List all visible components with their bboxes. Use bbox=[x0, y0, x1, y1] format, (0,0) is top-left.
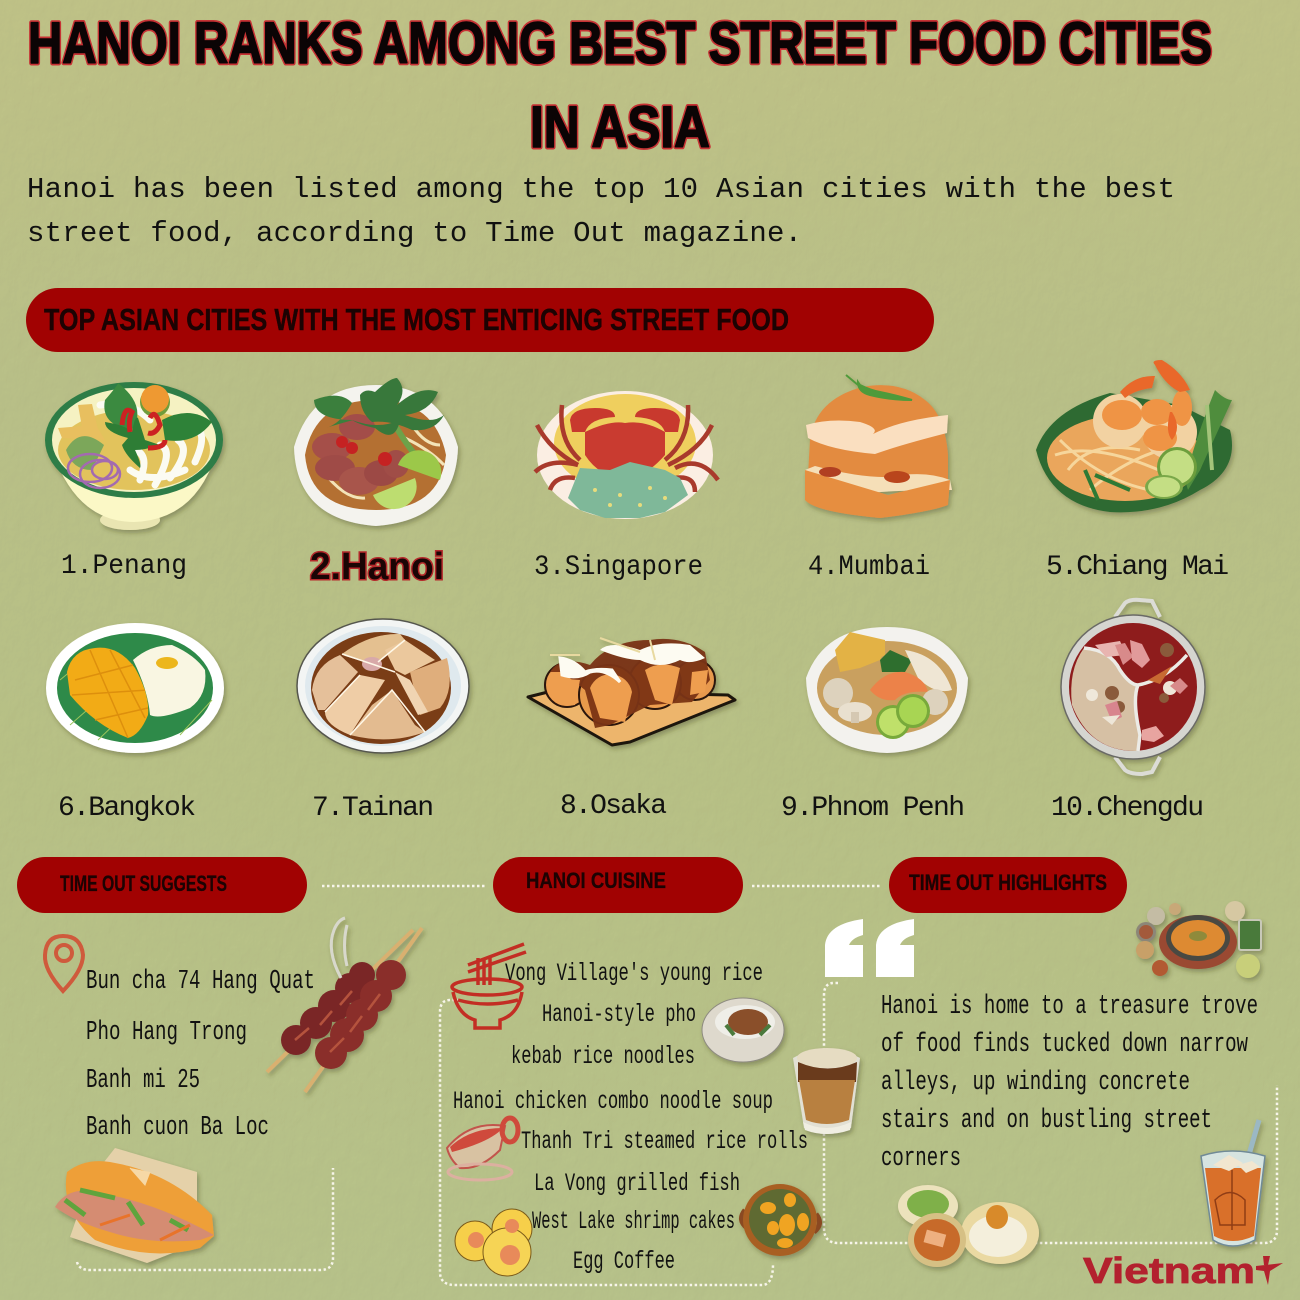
heading: Hanoi cuisine bbox=[493, 857, 743, 913]
image: shrimp cakes bbox=[455, 1209, 532, 1276]
label: Chiang Mai: 5.Chiang Mai bbox=[1046, 552, 1229, 583]
label: Tainan: 7.Tainan bbox=[312, 793, 434, 824]
text: Time Out quote: corners bbox=[881, 1144, 961, 1174]
dish: Mumbai vada pav bbox=[805, 375, 952, 518]
dish: Tainan dumplings bbox=[297, 619, 469, 753]
section banner: top Asian cities: TOP ASIAN CITIES WITH THE MOST ENTICING STREET FOOD bbox=[44, 302, 789, 337]
icon: noodle bowl bbox=[452, 944, 526, 1028]
image: rice noodle bowl bbox=[702, 998, 784, 1062]
list: Hanoi dishes: West Lake shrimp cakes bbox=[532, 1207, 735, 1236]
dish: Singapore chilli crab bbox=[535, 391, 718, 519]
dish: Bangkok mango sticky rice bbox=[46, 623, 224, 753]
list: Hanoi dishes: Egg Coffee bbox=[573, 1247, 675, 1276]
list: suggested places: Banh cuon Ba Loc bbox=[86, 1113, 269, 1143]
heading: Time Out suggests: TIME OUT SUGGESTS bbox=[60, 871, 227, 896]
heading: Time Out suggests bbox=[17, 857, 307, 913]
label: Chengdu: 10.Chengdu bbox=[1051, 793, 1204, 824]
heading: Time Out highlights bbox=[889, 857, 1127, 913]
dish: Chiang Mai pad thai bbox=[1036, 360, 1232, 512]
title: IN ASIA bbox=[530, 95, 710, 160]
logo: Vietnam+: Vietnam bbox=[1083, 1250, 1255, 1291]
list: Hanoi dishes: La Vong grilled fish bbox=[534, 1169, 740, 1198]
intro text: Hanoi has been listed among the top 10 Asian cities with the best bbox=[27, 173, 1175, 206]
image: glass of coffee bbox=[793, 1048, 860, 1134]
label: Mumbai: 4.Mumbai bbox=[808, 552, 930, 583]
heading: Time Out highlights: TIME OUT HIGHLIGHTS bbox=[909, 870, 1107, 895]
dish: Phnom Penh noodle soup bbox=[806, 627, 968, 753]
title: IN ASIA bbox=[530, 95, 710, 160]
list: Hanoi dishes: Hanoi-style pho bbox=[542, 1000, 696, 1029]
list: suggested places bbox=[86, 967, 315, 1143]
label: Hanoi: 2.Hanoi bbox=[310, 546, 444, 588]
list: suggested places: Bun cha 74 Hang Quat bbox=[86, 967, 315, 997]
text: Time Out quote bbox=[881, 992, 1258, 1174]
image: side dishes bbox=[898, 1185, 1039, 1267]
image: iced tea bbox=[1201, 1120, 1265, 1246]
icon: coffee cup bbox=[447, 1118, 518, 1180]
image: fish clay pot bbox=[741, 1184, 820, 1256]
icon: quotation marks bbox=[825, 919, 914, 977]
title bbox=[28, 11, 1212, 160]
image: grilled skewers bbox=[267, 918, 422, 1092]
icon: location pin bbox=[45, 936, 83, 991]
list: suggested places: Banh mi 25 bbox=[86, 1066, 200, 1096]
list: Hanoi dishes bbox=[453, 959, 808, 1276]
section banner: top Asian cities bbox=[26, 288, 934, 352]
list: Hanoi dishes: Thanh Tri steamed rice rolls bbox=[521, 1127, 808, 1156]
heading: Hanoi cuisine: HANOI CUISINE bbox=[526, 868, 666, 893]
label: Phnom Penh: 9.Phnom Penh bbox=[781, 793, 965, 824]
dish: Penang noodle bowl bbox=[45, 382, 223, 530]
list: Hanoi dishes: Vong Village's young rice bbox=[505, 959, 763, 988]
label: Singapore: 3.Singapore bbox=[534, 552, 703, 583]
intro text: street food, according to Time Out magazine. bbox=[27, 217, 802, 250]
image: food spread bbox=[1136, 901, 1261, 978]
label: Penang: 1.Penang bbox=[61, 551, 187, 582]
dish: Osaka takoyaki bbox=[528, 638, 735, 745]
dish: Chengdu hot pot bbox=[1061, 600, 1205, 774]
label: Osaka: 8.Osaka bbox=[560, 791, 667, 822]
logo: Vietnam+ bbox=[1083, 1250, 1283, 1291]
list: Hanoi dishes: Hanoi chicken combo noodle soup bbox=[453, 1087, 773, 1116]
list: suggested places: Pho Hang Trong bbox=[86, 1018, 247, 1048]
image: banh mi bbox=[55, 1148, 214, 1263]
intro text bbox=[27, 173, 1175, 250]
dish: Hanoi pho bbox=[294, 378, 458, 526]
list: Hanoi dishes: kebab rice noodles bbox=[511, 1042, 695, 1071]
label: Bangkok: 6.Bangkok bbox=[58, 793, 196, 824]
dotted frames and connectors bbox=[77, 886, 1277, 1285]
